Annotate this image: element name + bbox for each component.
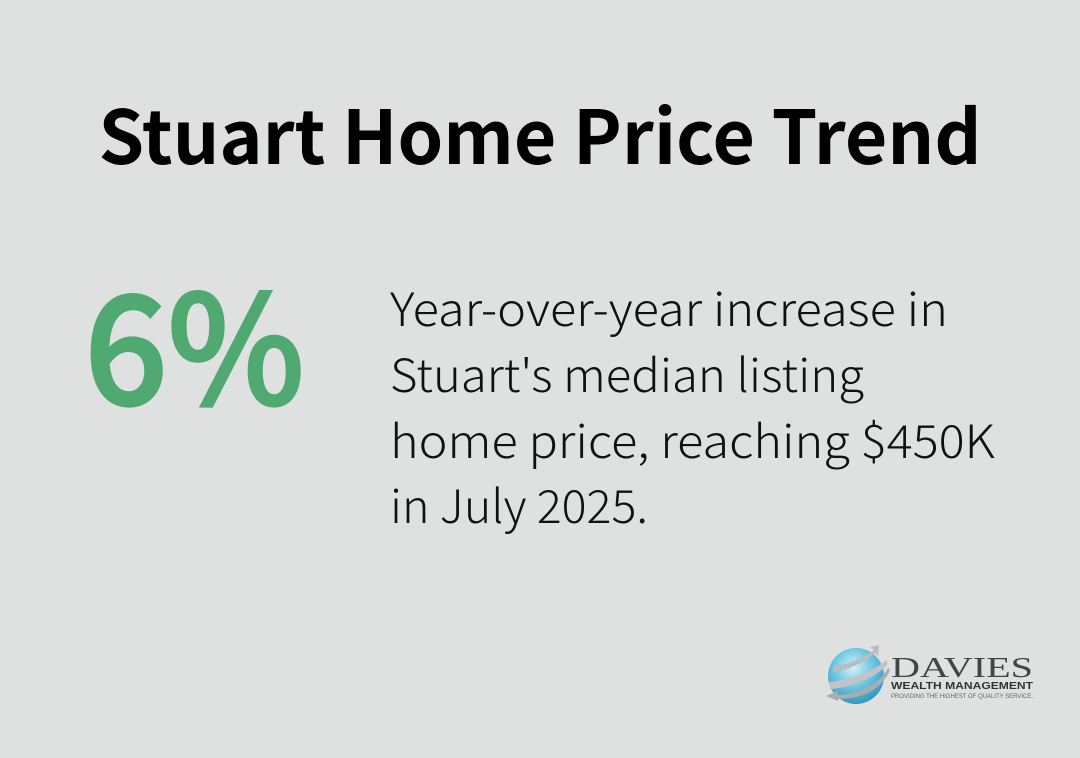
icon: globe with arrows [826,645,890,704]
logo: Davies Wealth Management [826,645,1034,704]
description text [390,274,995,537]
title: Stuart Home Price Trend [98,79,982,186]
description text: home price, reaching $450K [390,406,995,472]
description text: Stuart's median listing [390,340,864,406]
description text: Year-over-year increase in [390,274,948,340]
wordmark: DAVIES [891,652,1033,684]
tagline: PROVIDING THE HIGHEST OF QUALITY SERVICE. [891,693,1033,700]
big statistic: 6% [84,231,304,448]
description text: in July 2025. [390,471,648,537]
wordmark subtitle: WEALTH MANAGEMENT [891,680,1034,692]
